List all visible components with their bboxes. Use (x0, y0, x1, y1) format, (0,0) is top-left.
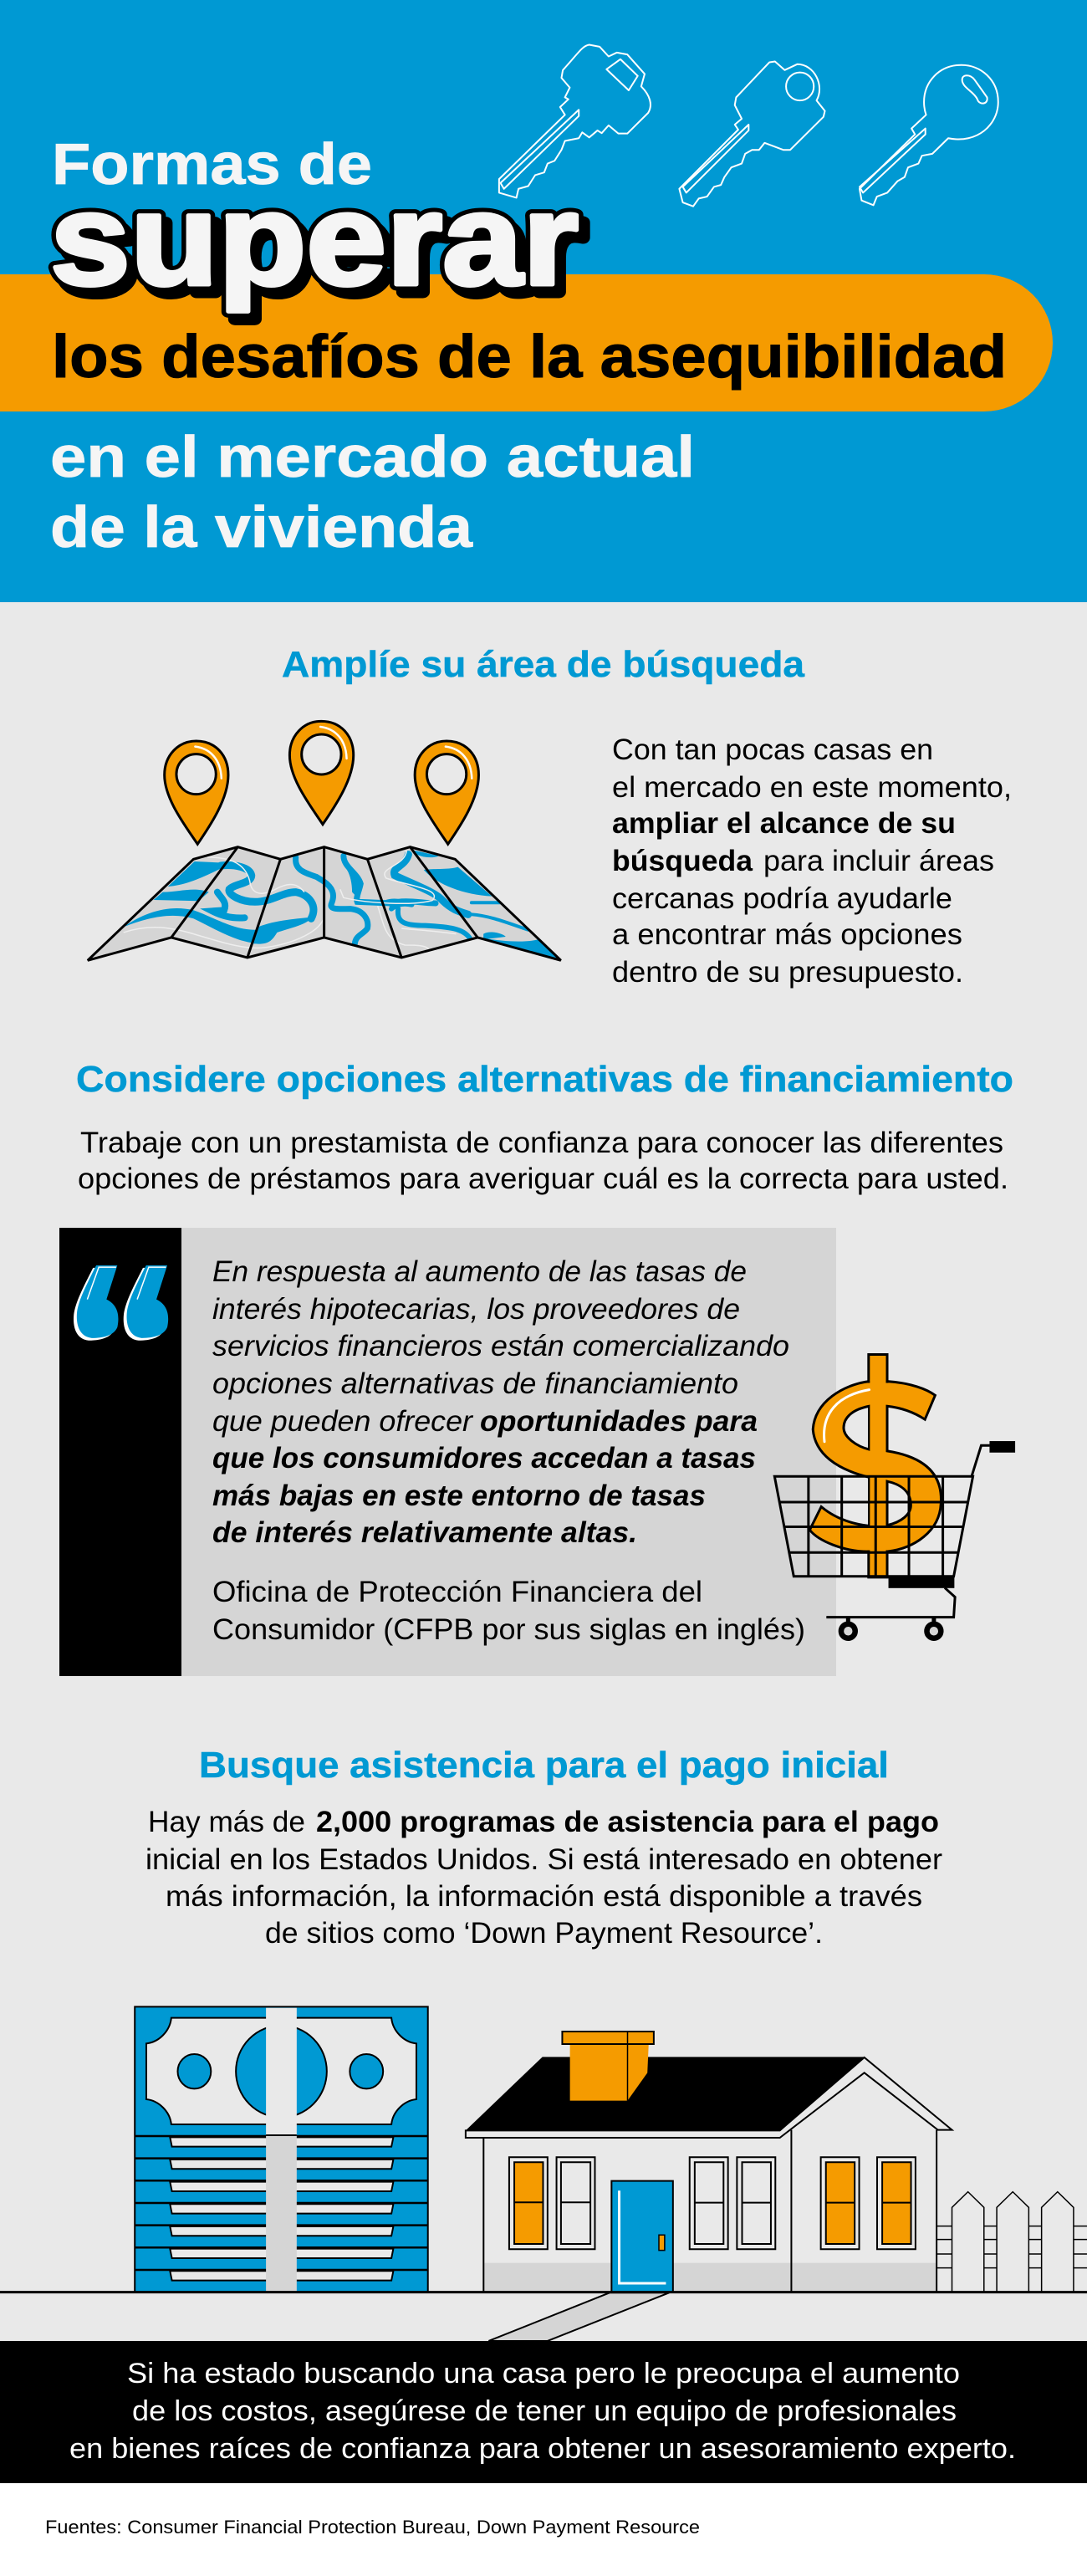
quote text: oportunidades para (480, 1405, 758, 1438)
icon: dollar sign (809, 1354, 941, 1577)
text block: search area: para incluir áreas (763, 845, 994, 877)
text block: search area: dentro de su presupuesto. (612, 956, 963, 989)
illustration: dollar sign in shopping cart (774, 1354, 1015, 1638)
text block: search area: búsqueda (612, 845, 753, 877)
quote attribution (212, 1576, 805, 1646)
icon: pin centre (289, 721, 354, 825)
icon: pin right (415, 741, 478, 844)
ground line (0, 2291, 1087, 2293)
icon: key two (679, 62, 825, 207)
quote attribution: Consumidor (CFPB por sus siglas en inglés) (212, 1613, 805, 1646)
title word: superar: superar (50, 167, 579, 313)
panel: header (0, 0, 1087, 602)
text block: search area: cercanas podría ayudarle (612, 882, 952, 915)
icon: quotation marks (74, 1265, 168, 1341)
quote text (212, 1255, 789, 1549)
panel: closing message: en bienes raíces de confianza para obtener un asesoramiento experto. (69, 2433, 1016, 2465)
windows (509, 2157, 916, 2249)
icon: key one (499, 45, 651, 197)
icon: three keys (499, 45, 998, 207)
panel: closing message (0, 2341, 1087, 2483)
heading: Busque asistencia: Busque asistencia para el pago inicial (199, 1745, 889, 1786)
panel: closing message: Si ha estado buscando una casa pero le preocupa el aumento (127, 2358, 960, 2389)
quote text: de interés relativamente altas. (212, 1516, 637, 1549)
text block: down payment assistance: de sitios como ‘Down Payment Resource’. (265, 1917, 823, 1950)
text block: search area: a encontrar más opciones (612, 918, 962, 951)
text block: search area: ampliar el alcance de su (612, 807, 956, 840)
map sheet (88, 847, 561, 960)
text block: financing intro (78, 1127, 1008, 1195)
panel: sources footer: Fuentes: Consumer Financial Protection Bureau, Down Payment Resource (45, 2517, 700, 2538)
text block: down payment assistance (145, 1806, 942, 1950)
text block: search area (612, 733, 1012, 989)
heading: Amplíe su área de búsqueda: Amplíe su área de búsqueda (282, 644, 805, 685)
heading: Considere opciones: Considere opciones alternativas de financiamiento (76, 1059, 1013, 1100)
icon: house (466, 2032, 952, 2292)
text block: down payment assistance: Hay más de (148, 1806, 305, 1838)
title line: de la vivienda: de la vivienda (50, 494, 473, 560)
quote text: que pueden ofrecer (212, 1405, 473, 1438)
title word: superar: superar (50, 167, 579, 313)
icon: key three (860, 65, 998, 205)
panel: quote (59, 1228, 836, 1676)
panel: closing message: de los costos, asegúrese de tener un equipo de profesionales (132, 2395, 957, 2427)
text block: down payment assistance: más información, la información está disponible a través (166, 1880, 922, 1913)
quote side bar (59, 1228, 181, 1676)
illustration: money and house (0, 2006, 1087, 2341)
text block: down payment assistance: 2,000 programas de asistencia para el pago (316, 1806, 939, 1838)
title line: en el mercado actual: en el mercado actual (50, 424, 695, 489)
text block: search area: el mercado en este momento, (612, 771, 1012, 804)
roof (466, 2057, 865, 2130)
icon: stack of money (135, 2006, 428, 2292)
walkway (488, 2292, 669, 2341)
icon: shopping cart (774, 1441, 1015, 1638)
orange title band (0, 274, 1053, 411)
quote text: que los consumidores accedan a tasas (212, 1442, 756, 1475)
quote text: En respuesta al aumento de las tasas de (212, 1255, 747, 1288)
text block: down payment assistance: inicial en los Estados Unidos. Si está interesado en obtener (145, 1843, 942, 1876)
panel: sources footer (0, 2483, 1087, 2576)
fence (936, 2192, 1087, 2292)
door (611, 2181, 673, 2292)
text block: search area: Con tan pocas casas en (612, 733, 933, 766)
icon: pin left (165, 741, 228, 844)
quote text: servicios financieros están comercializando (212, 1330, 789, 1362)
quote attribution: Oficina de Protección Financiera del (212, 1576, 702, 1608)
title line: Formas de: Formas de (52, 131, 372, 197)
quote text: más bajas en este entorno de tasas (212, 1480, 706, 1512)
quote text: opciones alternativas de financiamiento (212, 1367, 738, 1400)
text block: financing intro: Trabaje con un prestamista de confianza para conocer las diferentes (80, 1127, 1003, 1159)
title line: los desafíos: los desafíos de la asequibilidad (52, 324, 1007, 391)
chimney (562, 2032, 654, 2101)
title word: superar: superar (57, 175, 585, 320)
illustration: map with pins (88, 721, 561, 960)
text block: financing intro: opciones de préstamos para averiguar cuál es la correcta para usted. (78, 1163, 1008, 1195)
quote text: interés hipotecarias, los proveedores de (212, 1293, 740, 1326)
